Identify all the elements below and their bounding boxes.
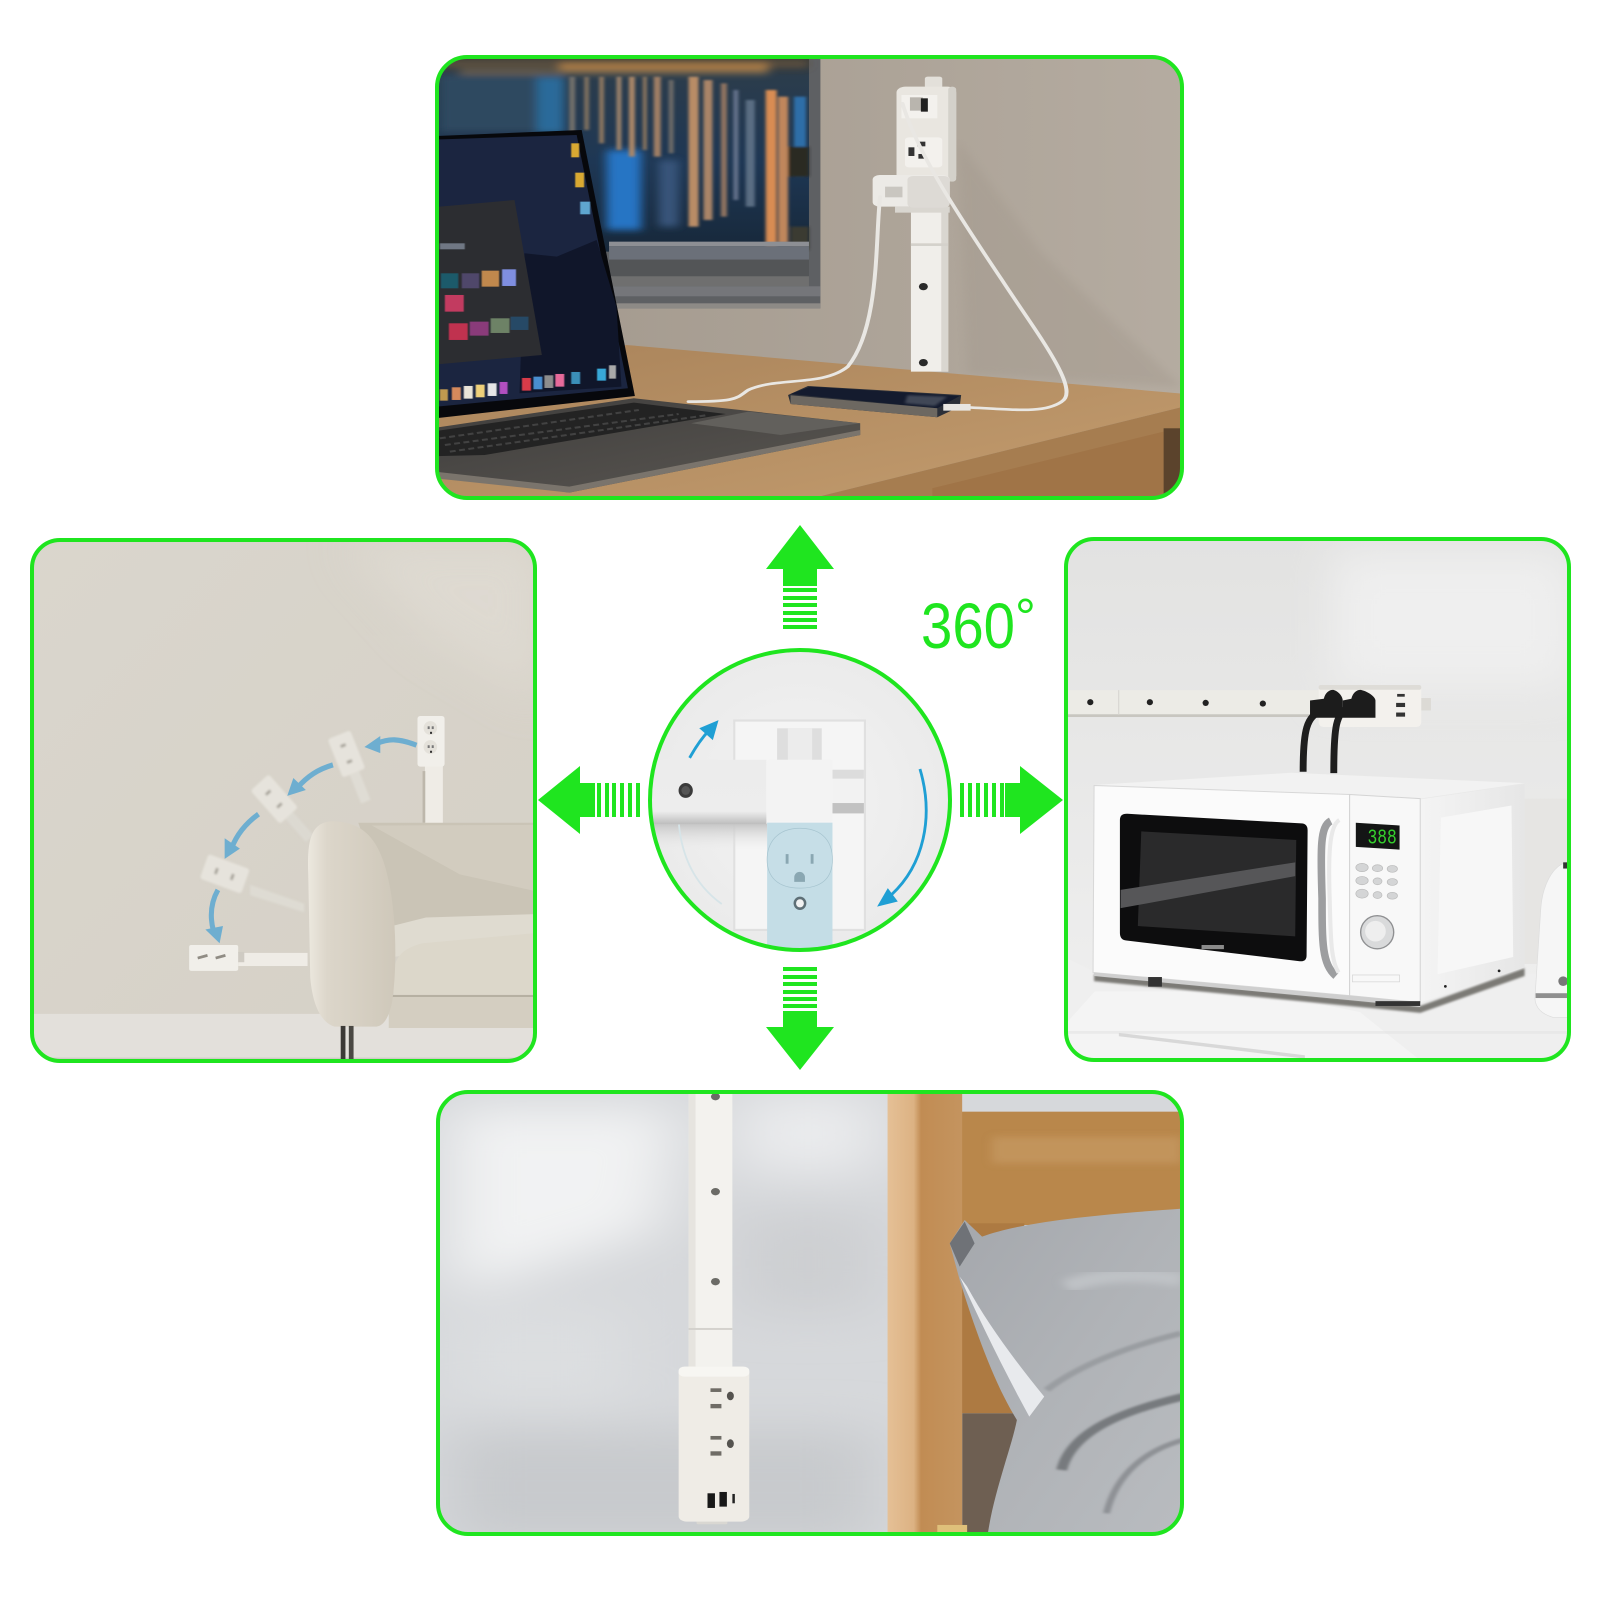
panel: desk scene with laptop and phone <box>435 55 1184 500</box>
circle border <box>650 650 950 950</box>
label: 360 degrees: ° <box>1015 589 1036 647</box>
laptop screen <box>420 130 635 420</box>
outlet strip, end position <box>189 945 308 971</box>
rail behind sofa <box>425 766 443 824</box>
wall <box>617 59 1180 496</box>
microwave knob <box>1361 916 1394 949</box>
arrow: right <box>960 766 1063 834</box>
faint arc <box>679 824 722 904</box>
kettle <box>1534 862 1567 1018</box>
blue rotation arrows <box>690 720 926 907</box>
wall shadow from outlet rail <box>957 140 1181 387</box>
headboard wood <box>888 1090 1191 1537</box>
counter <box>1064 957 1577 1067</box>
panel border: sofa scene <box>32 540 535 1061</box>
floor <box>34 1014 533 1058</box>
microwave buttons <box>1356 863 1397 899</box>
outlet strip, start position <box>418 716 445 767</box>
microwave display <box>1356 823 1400 850</box>
outlet strip <box>679 1367 749 1524</box>
microwave door window <box>1120 814 1308 961</box>
window sill bands <box>609 242 809 246</box>
right tab <box>832 770 864 813</box>
outlet rail on wall <box>897 77 956 372</box>
rotation arrows <box>211 740 416 931</box>
microwave: 388 <box>1368 826 1397 850</box>
arrow: up <box>766 525 834 629</box>
wall plate <box>733 719 866 931</box>
backsplash <box>1525 891 1542 964</box>
microwave handle <box>1321 821 1336 976</box>
label: 360 degrees: 360 <box>921 590 1015 662</box>
microwave <box>1093 773 1525 1013</box>
arrow: left <box>538 766 640 834</box>
pivot cube <box>767 760 832 822</box>
plugged-in charger <box>873 175 950 213</box>
arrow: down <box>766 967 834 1070</box>
circle: rotating plug detail <box>645 650 950 952</box>
ghost strips <box>200 730 377 912</box>
panel: kitchen scene with microwave <box>1050 530 1590 1070</box>
panel: bedroom scene with wall-mounted strip <box>420 1080 1200 1560</box>
upper plug tab <box>777 728 822 763</box>
sofa <box>308 821 538 1060</box>
window frame <box>606 59 820 308</box>
desk top <box>420 345 1186 507</box>
rail with mounting holes <box>1064 690 1320 717</box>
panel: sofa scene with rotation sequence <box>20 530 550 1071</box>
wall <box>34 542 533 1014</box>
laptop base <box>420 398 860 493</box>
wall <box>1068 541 1567 974</box>
desk front <box>822 408 1180 496</box>
laptop dock icons <box>440 365 616 401</box>
power strip <box>1319 685 1431 727</box>
panel border: desk scene <box>437 57 1182 498</box>
arm shadow <box>645 824 767 850</box>
rail <box>689 1090 732 1368</box>
horizontal arm <box>645 760 766 824</box>
ghost plug, blue <box>767 823 832 952</box>
night view through window <box>420 53 809 252</box>
charging cables <box>689 103 1067 410</box>
panel border: kitchen scene <box>1066 539 1569 1060</box>
phone <box>788 386 971 417</box>
wall <box>440 1094 1178 1532</box>
pillow and bedding <box>950 1208 1186 1540</box>
black plugs and cords <box>1303 690 1375 773</box>
panel border: bedroom scene <box>438 1092 1182 1534</box>
